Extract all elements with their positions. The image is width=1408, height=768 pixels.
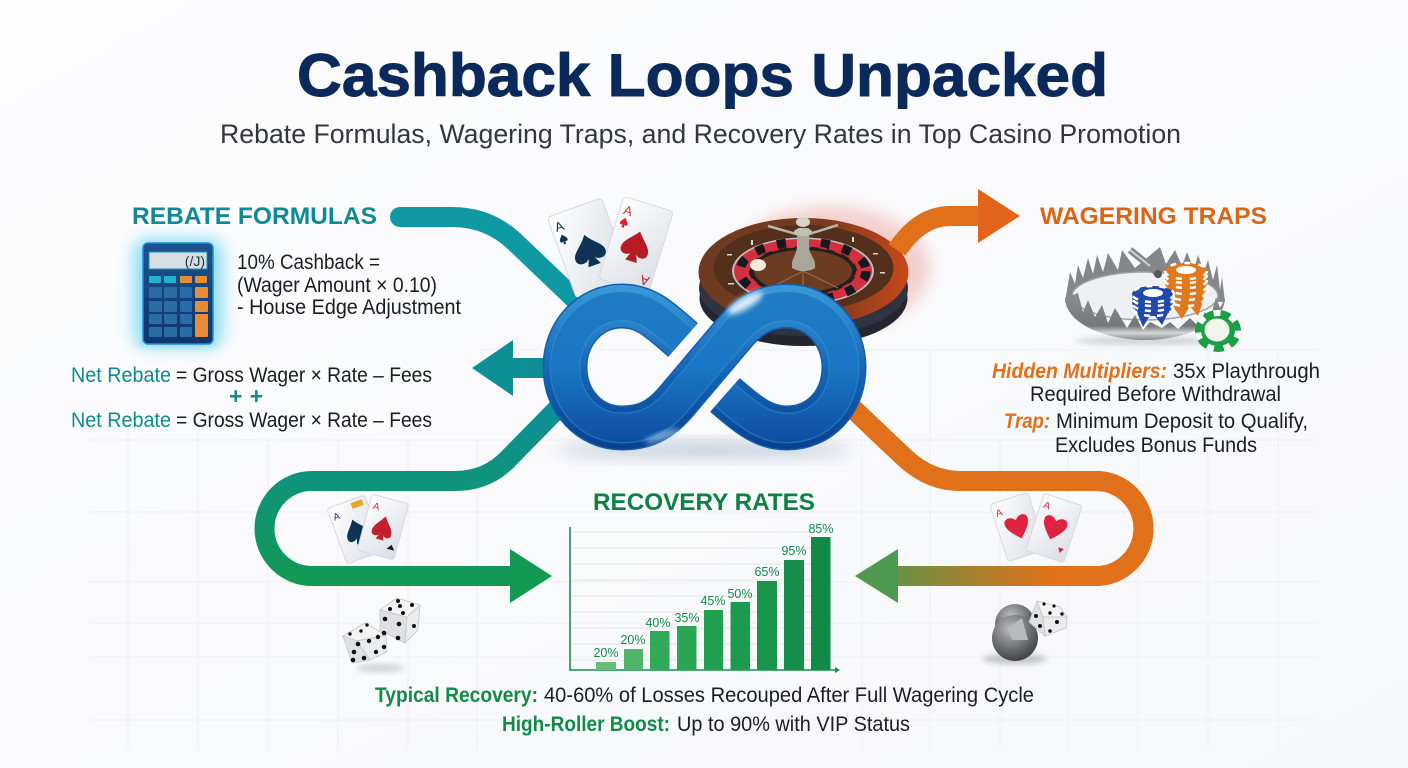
arrow: orange path into recovery rates [848, 404, 1144, 603]
text: recovery details: High-Roller Boost: [502, 713, 670, 736]
bar chart: recovery rates: 65% [754, 565, 780, 579]
title: Cashback Loops Unpacked [297, 42, 1108, 109]
text: cashback formula [237, 251, 461, 319]
arrow: green path into recovery rates [264, 402, 564, 603]
icon: calculator [133, 238, 223, 348]
text: net rebate formulas: = Gross Wager × Rate – Fees [176, 408, 432, 432]
bar chart: recovery rates [570, 522, 840, 673]
icon: calculator: (/J) [185, 253, 205, 269]
text: net rebate formulas: Net Rebate [71, 408, 171, 432]
text: wagering trap details: Trap: [1004, 409, 1050, 433]
text: wagering trap details: Hidden Multipliers: [992, 359, 1167, 383]
text: wagering trap details [992, 359, 1320, 457]
text: recovery details: Up to 90% with VIP Status [677, 713, 910, 736]
bar chart: recovery rates: 50% [727, 587, 753, 601]
text: recovery details: 40-60% of Losses Recouped After Full Wagering Cycle [544, 684, 1034, 707]
text: wagering trap details: 35x Playthrough [1173, 359, 1320, 383]
icon: cards lower left: A [332, 511, 342, 524]
subtitle: Rebate Formulas, Wagering Traps, and Recovery Rates in Top Casino Promotion [220, 119, 1181, 149]
heading: recovery rates: RECOVERY RATES [593, 489, 815, 516]
icon: bear trap with chips [1065, 247, 1241, 352]
text: cashback formula: 10% Cashback = [237, 251, 380, 274]
icon: roulette wheel [698, 206, 930, 346]
icon: cards lower left: A [372, 501, 381, 513]
bar chart: recovery rates: 20% [593, 646, 619, 660]
text: cashback formula: - House Edge Adjustment [237, 296, 461, 319]
bar chart: recovery rates: 85% [808, 522, 834, 536]
text: wagering trap details: Minimum Deposit to Qualify, [1056, 409, 1308, 433]
text: recovery details: Typical Recovery: [375, 684, 538, 707]
heading: wagering traps: WAGERING TRAPS [1040, 203, 1267, 230]
icon: playing cards top [547, 196, 673, 298]
icon: playing cards top: A [638, 272, 651, 289]
text: net rebate formulas: = Gross Wager × Rate – Fees [176, 363, 432, 387]
bar chart: recovery rates: 45% [700, 594, 726, 608]
icon: playing cards top: A [622, 202, 635, 219]
icon: cards lower right: A [994, 507, 1004, 520]
heading: rebate formulas: REBATE FORMULAS [132, 203, 377, 230]
text: wagering trap details: Required Before Withdrawal [1030, 382, 1281, 406]
text: net rebate formulas: Net Rebate [71, 363, 171, 387]
icon: playing cards top: A [553, 218, 566, 235]
arrow: teal path from rebate formulas [400, 217, 582, 306]
icon: dice lower left [343, 598, 420, 672]
arrow: orange arrow to wagering traps [897, 189, 1020, 250]
text: cashback formula: (Wager Amount × 0.10) [237, 274, 437, 297]
icon: infinity loop [554, 288, 854, 458]
bar chart: recovery rates: 40% [645, 616, 671, 630]
bar chart: recovery rates: 95% [781, 544, 807, 558]
text: net rebate formulas [71, 363, 432, 432]
icon: cards lower right [990, 492, 1082, 563]
arrow: teal arrow pointing to formulas [472, 340, 552, 396]
text: recovery details [375, 684, 1034, 736]
text: wagering trap details: Excludes Bonus Funds [1055, 433, 1257, 457]
icon: cards lower left [327, 494, 409, 564]
icon: cards lower right: A [1042, 500, 1052, 513]
bar chart: recovery rates: 20% [620, 633, 646, 647]
text: net rebate formulas: + + [229, 383, 263, 409]
icon: metal ball and die [983, 601, 1067, 664]
bar chart: recovery rates: 35% [674, 611, 700, 625]
